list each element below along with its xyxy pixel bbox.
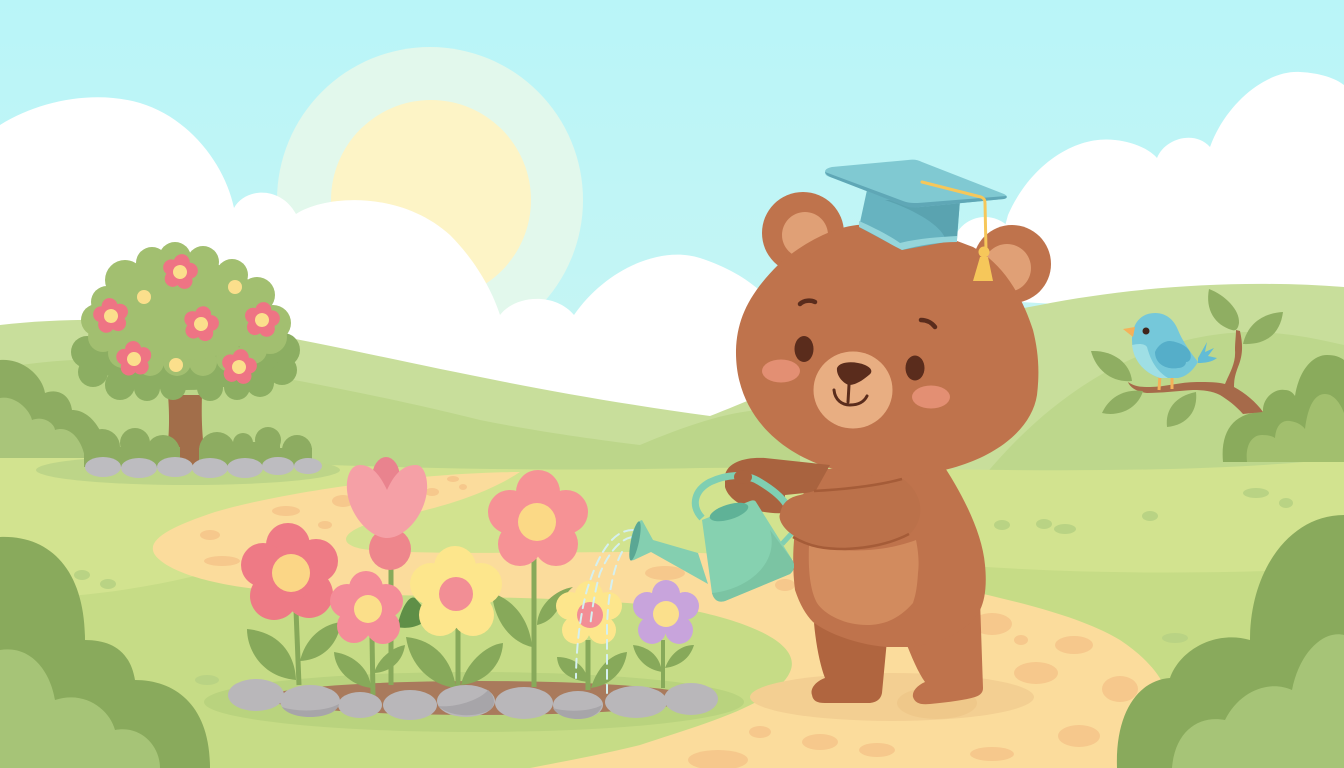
back arm bbox=[725, 458, 830, 513]
bird on branch bbox=[1091, 289, 1283, 427]
left back bush bbox=[0, 360, 108, 458]
arm lines bbox=[793, 479, 909, 549]
soil bbox=[265, 681, 695, 715]
tree ground patch bbox=[36, 455, 340, 485]
flower: tulip bbox=[347, 457, 427, 570]
nose and mouth bbox=[834, 362, 871, 405]
leaves bbox=[247, 587, 694, 688]
cap crown bbox=[859, 190, 960, 250]
torso bbox=[793, 460, 986, 647]
front left bush bbox=[0, 537, 210, 768]
branch bbox=[1128, 330, 1263, 414]
yellow buds bbox=[137, 280, 242, 372]
flower: yellow bbox=[410, 546, 502, 636]
stone shading bbox=[282, 690, 602, 719]
beak bbox=[1123, 327, 1135, 337]
flower: purple bbox=[633, 580, 699, 644]
bear bbox=[627, 160, 1051, 704]
grass flecks bbox=[74, 488, 1293, 685]
flower: pink tall bbox=[488, 470, 588, 566]
bird eye bbox=[1142, 328, 1150, 334]
flower: red bbox=[241, 523, 338, 620]
path speckles bbox=[200, 476, 1138, 768]
left back bush light bbox=[0, 398, 85, 458]
eyes bbox=[794, 336, 924, 380]
right back bush bbox=[1223, 355, 1344, 462]
water spray bbox=[576, 530, 633, 693]
bird body bbox=[1132, 313, 1198, 378]
spout rose bbox=[627, 521, 643, 561]
right back bush light bbox=[1247, 394, 1344, 462]
front arm bbox=[780, 479, 920, 550]
stones bbox=[228, 679, 718, 720]
bird legs bbox=[1159, 375, 1172, 390]
sky bbox=[0, 0, 1344, 430]
watering can bbox=[627, 476, 794, 602]
belly bbox=[809, 540, 919, 625]
cap band bbox=[859, 221, 957, 250]
mortarboard bbox=[825, 160, 1007, 207]
head bbox=[736, 224, 1038, 476]
distant hills bbox=[0, 284, 1344, 480]
can handle bbox=[695, 476, 786, 518]
thumb bbox=[734, 470, 752, 484]
trunk bbox=[166, 395, 206, 470]
stems bbox=[296, 555, 663, 695]
front right bush light bbox=[1172, 634, 1344, 768]
lower foliage bbox=[71, 320, 300, 401]
bushes bbox=[0, 355, 1344, 768]
stones at tree base bbox=[85, 457, 322, 478]
tassel bbox=[922, 182, 986, 250]
upper foliage bbox=[81, 242, 291, 376]
bed ground bbox=[204, 672, 744, 732]
winding path bbox=[153, 472, 1170, 768]
can opening bbox=[708, 499, 750, 525]
bird wing bbox=[1155, 341, 1191, 368]
bird belly bbox=[1132, 344, 1168, 378]
cheeks bbox=[762, 360, 950, 408]
blossoms bbox=[91, 251, 282, 386]
right leg bbox=[905, 600, 983, 704]
leaves bbox=[1091, 289, 1283, 427]
can spout bbox=[630, 520, 708, 584]
muzzle bbox=[814, 352, 892, 428]
graduation cap bbox=[825, 160, 1007, 281]
can body bbox=[702, 500, 794, 602]
clouds bbox=[0, 72, 1344, 430]
sun bbox=[277, 47, 583, 353]
flower: small yellow bbox=[556, 581, 622, 644]
flower: pink small bbox=[330, 571, 403, 644]
left leg bbox=[812, 623, 887, 703]
flower bed bbox=[204, 457, 744, 732]
can shade bbox=[712, 530, 794, 602]
bear shadow bbox=[750, 673, 1034, 721]
ears bbox=[762, 192, 1051, 303]
bird tail bbox=[1198, 342, 1217, 363]
flowering tree bbox=[36, 242, 340, 485]
shrubs at tree base bbox=[84, 427, 312, 469]
brows bbox=[800, 301, 935, 327]
foreground meadow bbox=[0, 458, 1344, 768]
front left bush light bbox=[0, 649, 160, 768]
front right bush bbox=[1117, 515, 1344, 768]
